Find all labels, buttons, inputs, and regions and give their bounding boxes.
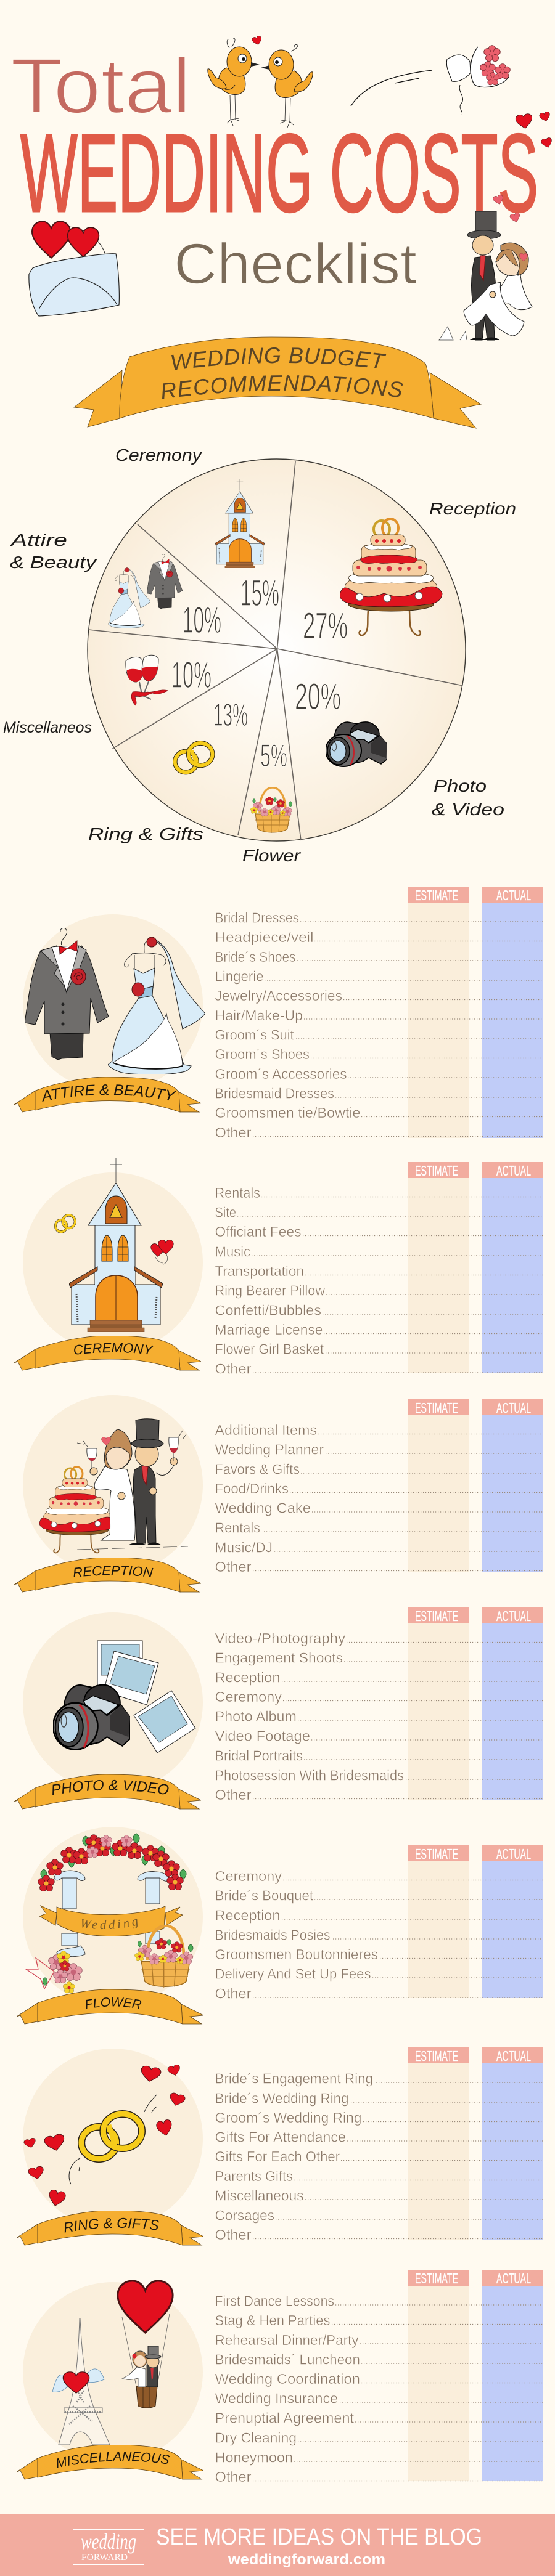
badge circle xyxy=(23,1395,203,1575)
checklist rows: Ring Bearer Pillow xyxy=(215,1283,325,1299)
checklist rows xyxy=(215,1868,543,2001)
panel: attire and beauty xyxy=(14,887,543,1140)
icon: bouquet xyxy=(26,1951,82,1993)
checklist rows: Video Footage xyxy=(215,1728,310,1744)
checklist rows: Bride´s Shoes xyxy=(215,949,296,965)
illustration: bride and groom xyxy=(439,194,532,340)
checklist rows: Music xyxy=(215,1243,250,1259)
illustration: heart balloon xyxy=(118,2281,173,2408)
pie label: Ring & Gifts: Ring & Gifts xyxy=(88,824,204,843)
icon: rings xyxy=(81,2114,142,2159)
checklist rows: Photo Album xyxy=(215,1708,297,1724)
pie value: 5%: 5% xyxy=(260,738,287,774)
title: Checklist: Checklist xyxy=(174,232,417,296)
checklist rows: Headpiece/veil xyxy=(215,929,313,945)
checklist rows: Other xyxy=(215,1360,252,1376)
pie icon: cake xyxy=(340,519,442,635)
estimate column xyxy=(408,1399,469,1572)
title: Total: Total xyxy=(10,42,191,129)
checklist rows xyxy=(215,909,543,1140)
checklist rows: Video-/Photography xyxy=(215,1630,346,1646)
icon: hearts xyxy=(151,1240,173,1264)
illustration: flower garland xyxy=(38,1834,186,1891)
checklist rows: Ceremony xyxy=(215,1868,282,1884)
icon: camera xyxy=(53,1685,130,1750)
panel: reception xyxy=(14,1395,543,1593)
checklist rows: Gifts For Attendance xyxy=(215,2129,346,2145)
pie slice dividers xyxy=(89,461,462,840)
icon: hearts xyxy=(23,2064,186,2208)
checklist rows: Bride´s Wedding Ring xyxy=(215,2090,349,2106)
illustration: columns xyxy=(54,1871,169,1957)
checklist rows: First Dance Lessons xyxy=(215,2293,334,2309)
pie icon: suit xyxy=(147,554,183,609)
checklist rows xyxy=(215,1630,543,1803)
checklist rows: Reception xyxy=(215,1908,280,1924)
illustration: eiffel tower xyxy=(59,2318,110,2445)
logo: wedding forward: FORWARD xyxy=(81,2553,128,2562)
checklist rows: Engagement Shoots xyxy=(215,1650,343,1666)
checklist rows: Officiant Fees xyxy=(215,1224,301,1240)
checklist rows: Confetti/Bubbles xyxy=(215,1302,321,1318)
illustration: wedding ribbon: Wedding xyxy=(81,1919,138,1930)
checklist rows: Wedding Insurance xyxy=(215,2391,338,2407)
banner label: ceremony: CEREMONY xyxy=(74,1343,154,1354)
pie label: Ceremony: Ceremony xyxy=(115,445,203,465)
pie value: 15%: 15% xyxy=(240,572,279,614)
checklist rows: Food/Drinks xyxy=(215,1481,289,1497)
badge circle xyxy=(23,1827,203,2007)
icon: wedding dress xyxy=(108,937,205,1075)
checklist rows: Miscellaneous xyxy=(215,2187,303,2203)
estimate column: ESTIMATE xyxy=(415,1163,458,1179)
pie label: Photo & Video: & Video xyxy=(432,800,504,819)
checklist rows: Bridesmaid Dresses xyxy=(215,1086,334,1102)
pie label: Photo & Video: Photo xyxy=(434,776,487,795)
icon: winged heart xyxy=(52,2369,104,2393)
banner label: miscellaneous xyxy=(17,2445,204,2480)
icon: cake xyxy=(39,1467,115,1553)
checklist rows: Ceremony xyxy=(215,1689,282,1705)
banner label: ceremony xyxy=(14,1336,201,1371)
actual column xyxy=(482,887,543,1138)
checklist rows: Groom´s Accessories xyxy=(215,1066,347,1082)
estimate column: ESTIMATE xyxy=(415,887,458,903)
actual column xyxy=(482,2270,543,2481)
checklist rows: Lingerie xyxy=(215,969,264,985)
checklist rows: Music/DJ xyxy=(215,1539,273,1555)
checklist rows: Groomsmen Boutonnieres xyxy=(215,1946,378,1962)
icon: flower basket xyxy=(134,1925,193,1988)
checklist rows: Reception xyxy=(215,1670,280,1686)
estimate column xyxy=(408,1607,469,1800)
pie label: Attire & Beauty: & Beauty xyxy=(10,553,97,572)
banner: wedding budget recommendations: WEDDING BUDGET xyxy=(171,347,386,370)
pie icon: flower basket xyxy=(250,787,292,833)
checklist rows: Other xyxy=(215,2227,252,2243)
checklist rows: Other xyxy=(215,2469,252,2485)
illustration: kissing birds xyxy=(208,36,313,128)
checklist rows: Corsages xyxy=(215,2207,274,2223)
illustration: wedding ribbon xyxy=(39,1905,183,1936)
banner: wedding budget recommendations xyxy=(73,336,482,429)
banner label: photo and video: PHOTO & VIDEO xyxy=(52,1779,169,1795)
checklist rows: Jewelry/Accessories xyxy=(215,988,342,1004)
icon: polaroids xyxy=(97,1641,195,1753)
panel: photo and video xyxy=(14,1607,543,1810)
banner label: ring and gifts xyxy=(17,2211,204,2246)
badge circle xyxy=(23,1172,203,1352)
checklist rows: Flower Girl Basket xyxy=(215,1341,324,1357)
pie icon: camera xyxy=(326,722,387,766)
checklist rows: Bride´s Engagement Ring xyxy=(215,2070,373,2086)
estimate column: ESTIMATE xyxy=(415,2270,458,2286)
actual column: ACTUAL xyxy=(496,1846,531,1862)
checklist rows: Rentals xyxy=(215,1519,260,1535)
banner label: flower xyxy=(17,1989,204,2025)
checklist rows: Additional Items xyxy=(215,1422,317,1438)
pie icon: dress xyxy=(108,567,150,628)
checklist rows: Bridal Dresses xyxy=(215,909,299,925)
badge circle xyxy=(23,2049,203,2229)
checklist rows xyxy=(215,2293,543,2485)
logo: wedding forward: wedding xyxy=(81,2529,136,2554)
pie label: Attire & Beauty: Attire xyxy=(9,530,67,550)
checklist rows: Site xyxy=(215,1204,236,1220)
banner label: flower: FLOWER xyxy=(86,1997,142,2009)
checklist rows: Other xyxy=(215,1787,252,1803)
checklist rows: Honeymoon xyxy=(215,2450,293,2466)
banner: wedding budget recommendations: RECOMMENDATIONS xyxy=(162,375,403,399)
checklist rows: Other xyxy=(215,1985,252,2001)
checklist rows: Parents Gifts xyxy=(215,2168,293,2184)
banner label: reception xyxy=(14,1558,201,1593)
pie label: Reception: Reception xyxy=(429,499,516,518)
pie value: 13%: 13% xyxy=(213,697,248,733)
panel: ceremony xyxy=(14,1158,543,1376)
banner label: ring and gifts: RING & GIFTS xyxy=(64,2218,159,2233)
pie icon: wine glasses xyxy=(126,655,168,705)
pie label: Attire & Beauty xyxy=(9,530,97,572)
checklist rows: Favors & Gifts xyxy=(215,1461,300,1477)
logo: wedding forward xyxy=(73,2529,144,2564)
call to action: SEE MORE IDEAS ON THE BLOG xyxy=(156,2524,482,2550)
estimate column xyxy=(408,2270,469,2481)
checklist rows xyxy=(215,1185,543,1376)
estimate column: ESTIMATE xyxy=(415,1846,458,1862)
estimate column xyxy=(408,887,469,1138)
website: weddingforward.com xyxy=(228,2551,385,2568)
checklist rows: Bridesmaids´ Luncheon xyxy=(215,2351,360,2367)
pie label: Miscellaneos: Miscellaneos xyxy=(3,719,92,736)
checklist rows: Hair/Make-Up xyxy=(215,1007,303,1023)
checklist rows: Marriage License xyxy=(215,1322,323,1338)
checklist rows: Groomsmen tie/Bowtie xyxy=(215,1105,360,1121)
panel: ring and gifts xyxy=(17,2047,543,2246)
estimate column xyxy=(408,1845,469,1998)
actual column xyxy=(482,1399,543,1572)
checklist rows: Bridesmaids Posies xyxy=(215,1927,331,1943)
chart: budget pie xyxy=(3,445,516,865)
estimate column xyxy=(408,2047,469,2240)
checklist rows: Other xyxy=(215,1559,252,1575)
estimate column: ESTIMATE xyxy=(415,1608,458,1624)
estimate column xyxy=(408,1162,469,1373)
checklist rows: Groom´s Wedding Ring xyxy=(215,2110,361,2126)
banner label: miscellaneous: MISCELLANEOUS xyxy=(57,2452,170,2468)
checklist rows: Wedding Planner xyxy=(215,1442,324,1458)
estimate column: ESTIMATE xyxy=(415,2048,458,2064)
actual column: ACTUAL xyxy=(496,1608,531,1624)
pie icon: rings xyxy=(175,743,213,772)
icon: church xyxy=(69,1158,163,1332)
checklist rows: Bridal Portraits xyxy=(215,1747,303,1763)
panel: miscellaneous xyxy=(17,2270,543,2485)
checklist rows: Groom´s Suit xyxy=(215,1026,294,1042)
actual column: ACTUAL xyxy=(496,2270,531,2286)
checklist rows: Wedding Coordination xyxy=(215,2371,360,2387)
pie label: Flower: Flower xyxy=(242,846,302,865)
checklist rows xyxy=(215,2070,543,2243)
icon: envelope with hearts xyxy=(29,221,119,316)
footer band xyxy=(0,2514,555,2576)
actual column xyxy=(482,1845,543,1998)
checklist rows xyxy=(215,1422,543,1575)
pie value: 20%: 20% xyxy=(295,676,341,717)
actual column: ACTUAL xyxy=(496,887,531,903)
checklist rows: Transportation xyxy=(215,1263,304,1279)
checklist rows: Wedding Cake xyxy=(215,1500,311,1516)
pie label: Photo & Video xyxy=(432,776,504,819)
badge circle xyxy=(23,2282,203,2462)
pie disc xyxy=(88,459,466,841)
actual column: ACTUAL xyxy=(496,1163,531,1179)
panel: flower xyxy=(17,1827,543,2025)
banner label: photo and video xyxy=(14,1774,201,1810)
badge circle xyxy=(23,1612,203,1792)
estimate column: ESTIMATE xyxy=(415,1400,458,1416)
checklist rows: Dry Cleaning xyxy=(215,2430,297,2446)
actual column: ACTUAL xyxy=(496,1400,531,1416)
pie icon: church xyxy=(215,479,265,568)
pie value: 10% miscellaneous: 10% xyxy=(171,654,212,696)
checklist rows: Other xyxy=(215,1124,252,1140)
checklist rows: Prenuptial Agreement xyxy=(215,2410,355,2426)
checklist rows: Bride´s Bouquet xyxy=(215,1888,314,1904)
actual column: ACTUAL xyxy=(496,2048,531,2064)
checklist rows: Rehearsal Dinner/Party xyxy=(215,2332,359,2348)
illustration: thrown bouquet xyxy=(351,46,510,115)
pie value: 27%: 27% xyxy=(303,605,348,646)
banner label: reception: RECEPTION xyxy=(74,1566,153,1577)
illustration: couple toasting xyxy=(77,1419,188,1550)
icon: small rings xyxy=(56,1215,75,1232)
checklist rows: Stag & Hen Parties xyxy=(215,2312,331,2328)
actual column xyxy=(482,1162,543,1373)
actual column xyxy=(482,2047,543,2240)
checklist rows: Groom´s Shoes xyxy=(215,1046,310,1062)
badge circle xyxy=(23,914,203,1092)
pie value: 10% attire: 10% xyxy=(183,599,221,641)
checklist rows: Rentals xyxy=(215,1185,260,1201)
checklist rows: Photosession With Bridesmaids xyxy=(215,1767,404,1783)
icon: flying hearts xyxy=(516,111,553,149)
banner label: attire and beauty xyxy=(14,1077,201,1113)
actual column xyxy=(482,1607,543,1800)
icon: suit xyxy=(25,928,109,1060)
checklist rows: Gifts For Each Other xyxy=(215,2148,340,2164)
checklist rows: Delivery And Set Up Fees xyxy=(215,1965,371,1981)
banner label: attire and beauty: ATTIRE & BEAUTY xyxy=(42,1084,176,1102)
